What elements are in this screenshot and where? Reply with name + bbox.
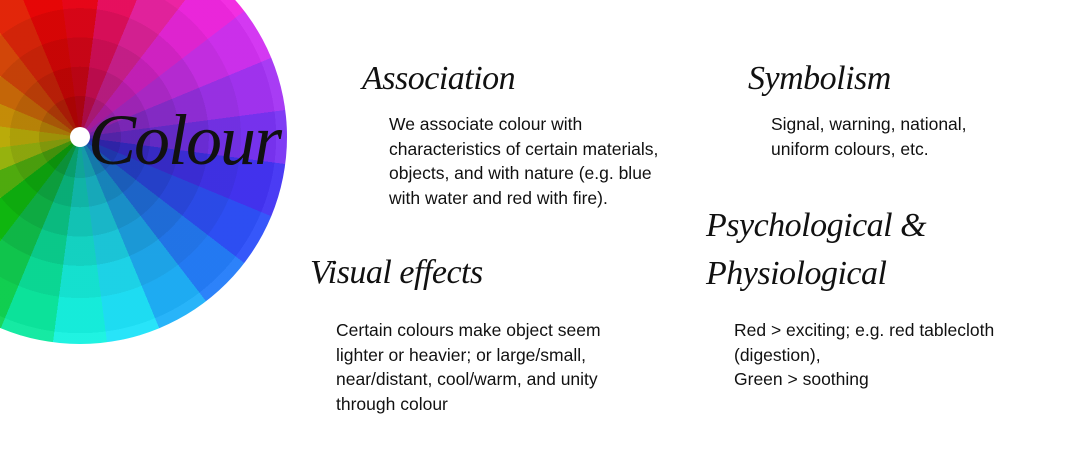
text: association: objects, and with nature (e.g. blue bbox=[389, 163, 652, 183]
text: psychological bbox=[734, 320, 994, 389]
text: symbolism bbox=[771, 114, 967, 158]
text: visual effects: near/distant, cool/warm, and unity bbox=[336, 369, 598, 389]
text: visual effects: through colour bbox=[336, 394, 448, 414]
text: association: with water and red with fire). bbox=[389, 188, 608, 208]
text: psychological: Green > soothing bbox=[734, 369, 869, 389]
heading: Symbolism: Symbolism bbox=[748, 60, 891, 97]
title: Colour: Colour bbox=[88, 100, 280, 180]
heading: Psychological & Physiological: Psychological & bbox=[706, 207, 926, 244]
text: visual effects bbox=[336, 320, 601, 414]
heading: Psychological & Physiological: Physiological bbox=[706, 255, 886, 292]
heading: Psychological & Physiological bbox=[706, 207, 926, 292]
text: association: We associate colour with bbox=[389, 114, 582, 134]
text: association bbox=[389, 114, 658, 208]
text: association: characteristics of certain materials, bbox=[389, 138, 658, 158]
text: symbolism: Signal, warning, national, bbox=[771, 114, 967, 134]
text: visual effects: lighter or heavier; or large/small, bbox=[336, 344, 586, 364]
text: psychological: (digestion), bbox=[734, 344, 821, 364]
heading: Visual effects: Visual effects bbox=[310, 254, 483, 291]
heading: Association: Association bbox=[362, 60, 515, 97]
text: visual effects: Certain colours make object seem bbox=[336, 320, 601, 340]
text: psychological: Red > exciting; e.g. red tablecloth bbox=[734, 320, 994, 340]
text: symbolism: uniform colours, etc. bbox=[771, 138, 929, 158]
colour wheel bbox=[0, 0, 287, 344]
